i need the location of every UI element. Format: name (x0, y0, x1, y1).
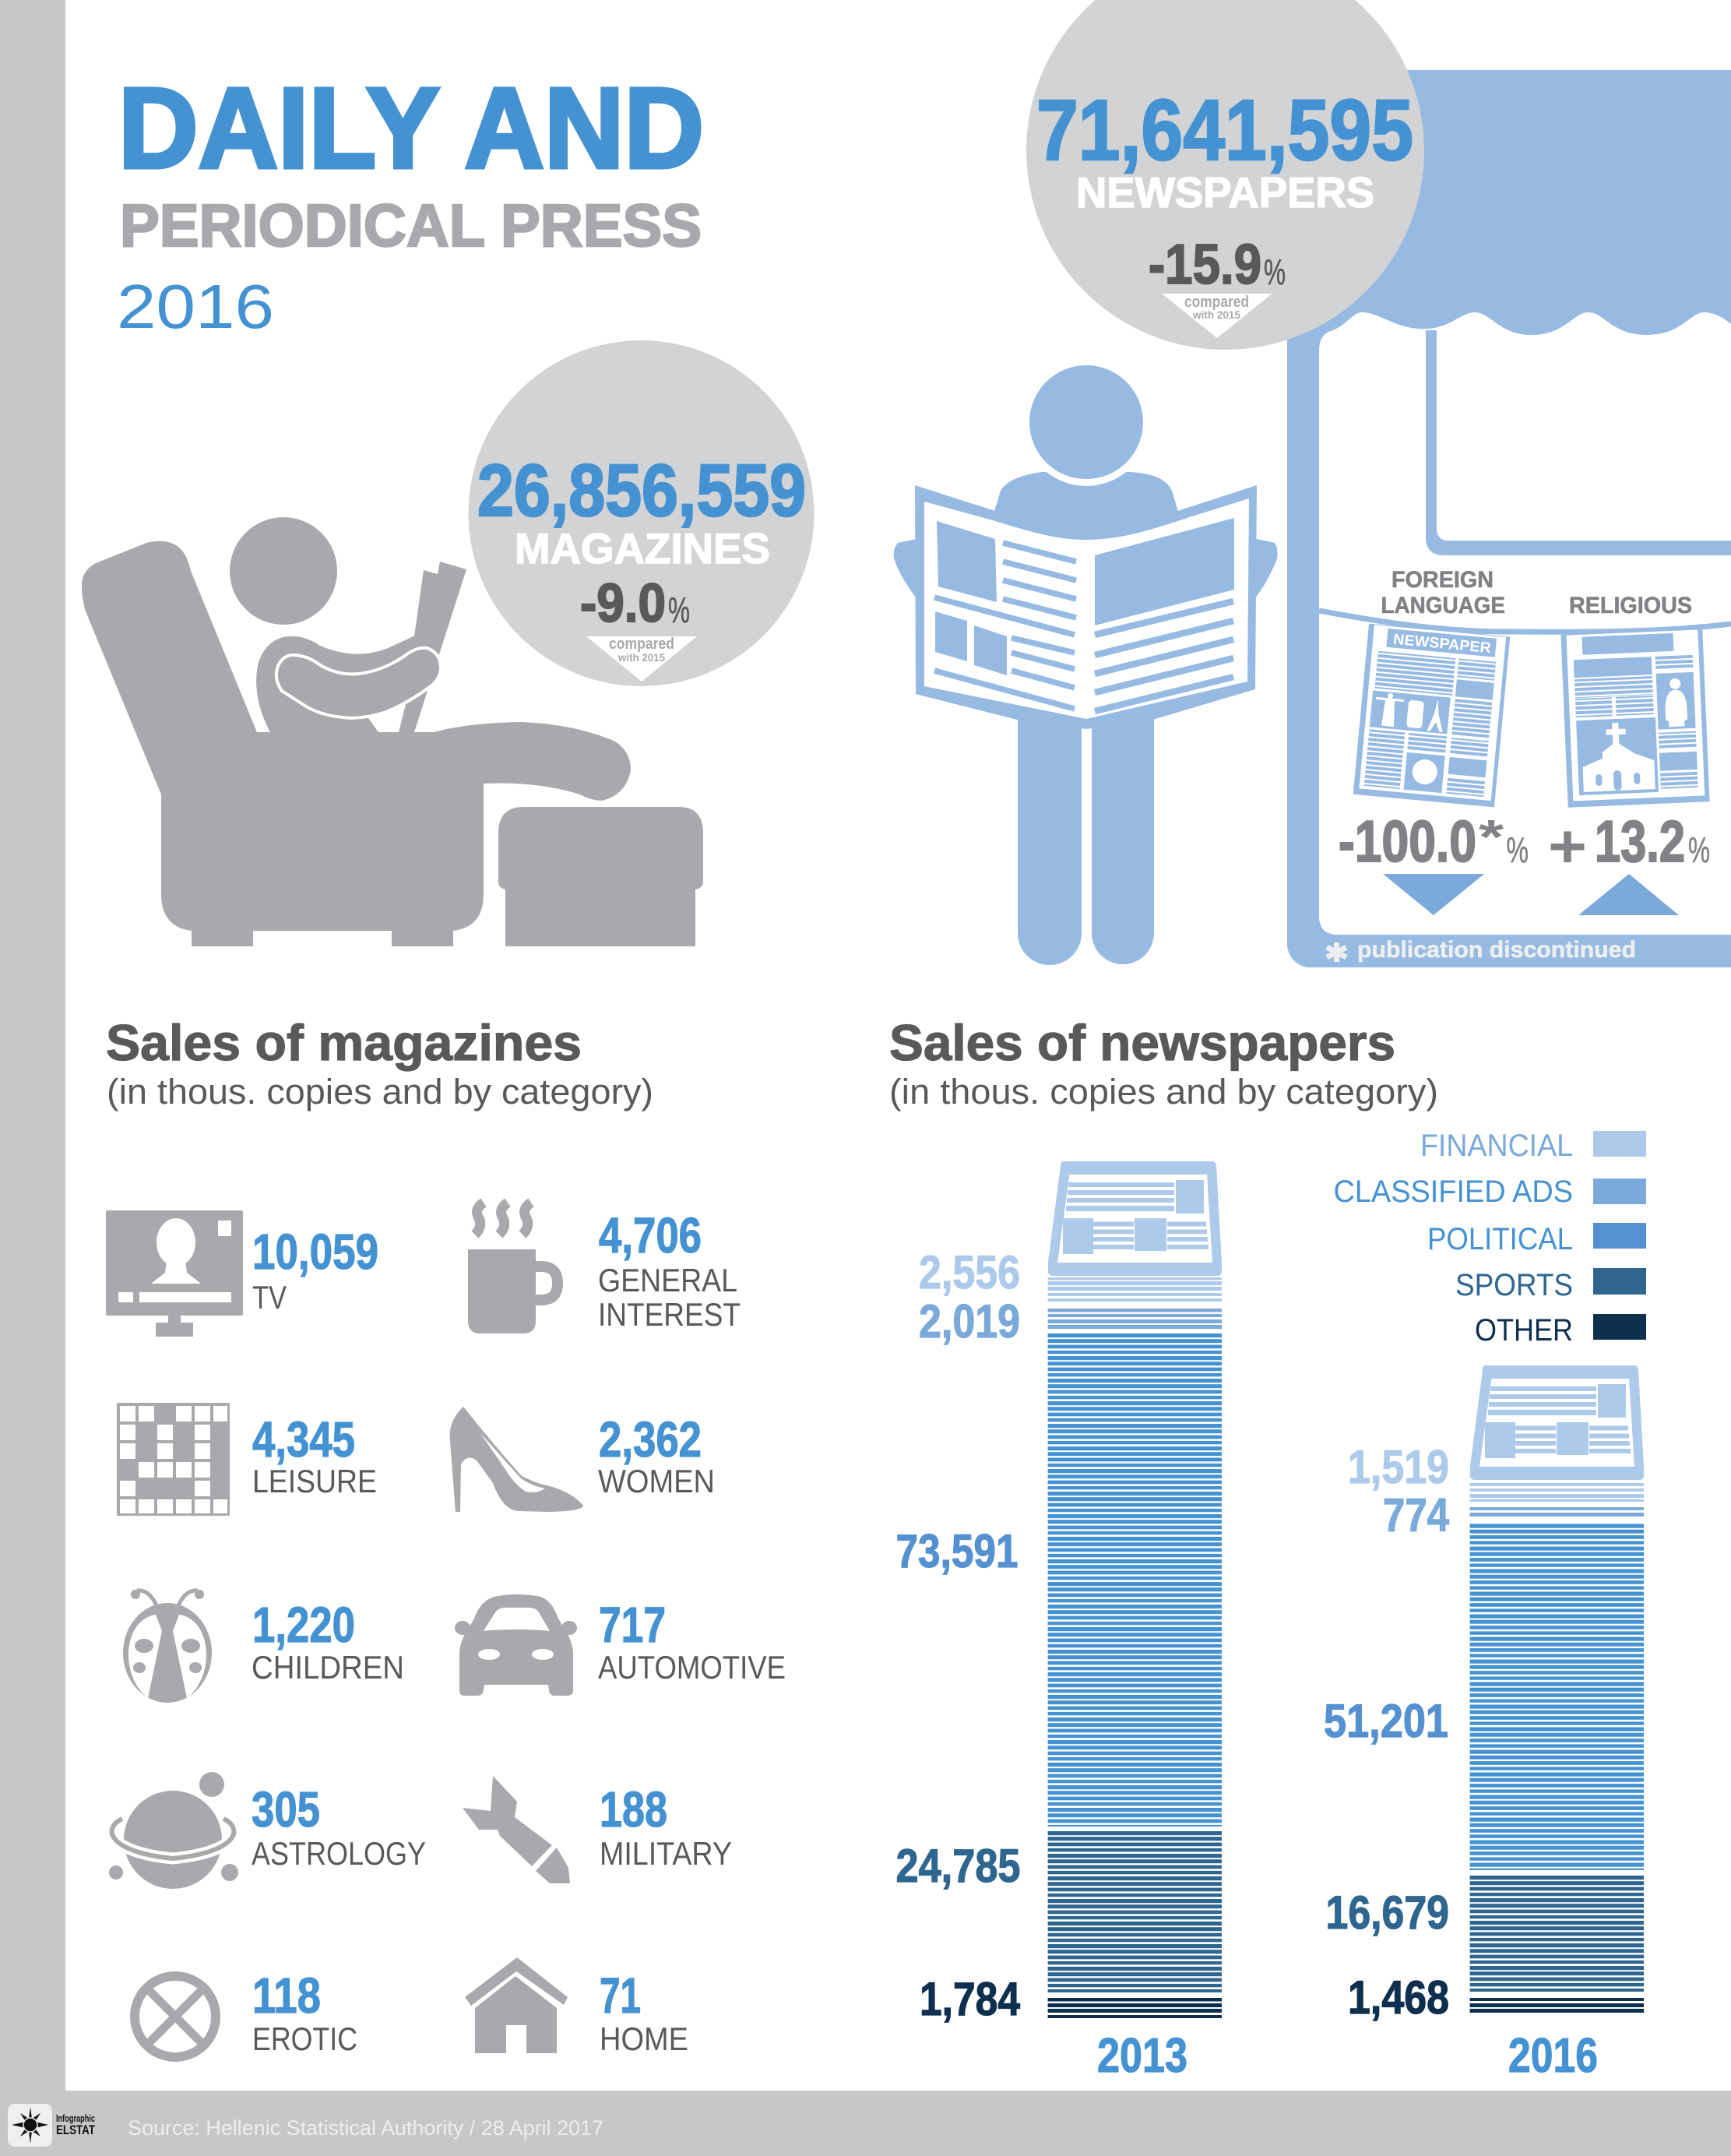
title line: daily and: DAILY AND (118, 65, 704, 192)
label: AUTOMOTIVE (598, 1649, 786, 1686)
value: 4,706 (599, 1207, 702, 1263)
legend (1333, 1129, 1646, 1348)
arrow caption: compared (1184, 294, 1249, 311)
change value: 13.2 (1595, 808, 1685, 874)
legend item: classified ads: CLASSIFIED ADS (1333, 1175, 1573, 1209)
icon: television (106, 1210, 243, 1337)
value: 10,059 (252, 1224, 378, 1280)
heading: sales of magazines (106, 1014, 653, 1111)
newspaper page (924, 498, 1249, 719)
value: financial 2016: 1,519 (1348, 1441, 1449, 1493)
magazine category: astrology (109, 1772, 426, 1889)
financial stripes 2013 (1048, 1277, 1222, 1302)
value: classified 2016: 774 (1383, 1489, 1450, 1541)
newspapers number: 71,641,595 (1036, 83, 1413, 178)
legend item: financial: FINANCIAL (1420, 1129, 1573, 1163)
label: TV (252, 1279, 287, 1316)
magazine category: tv (106, 1210, 378, 1337)
icon: ladybug (123, 1590, 212, 1703)
magazine category: children (123, 1590, 404, 1703)
newspapers label: NEWSPAPERS (1076, 168, 1374, 217)
text lines (1095, 601, 1233, 711)
icon: missile (463, 1776, 570, 1883)
icon: foreign newspaper page: NEWSPAPER (1392, 632, 1492, 657)
head (230, 517, 337, 625)
source line: Source: Hellenic Statistical Authority / 28 April 2017 (128, 2116, 603, 2140)
legs (1018, 701, 1154, 965)
footnote (1327, 937, 1636, 963)
change value: -100.0 (1339, 808, 1476, 874)
value: financial 2013: 2,556 (919, 1246, 1020, 1298)
sports stripes 2013 (1048, 1831, 1222, 1992)
legend item: sports: SPORTS (1455, 1268, 1573, 1302)
heading text: Sales of magazines (106, 1014, 582, 1071)
value: political 2016: 51,201 (1324, 1695, 1448, 1747)
footnote asterisk: * (1479, 811, 1504, 865)
arm (276, 648, 441, 718)
magazine category: military (463, 1776, 732, 1883)
financial stripes 2016 (1470, 1483, 1644, 1502)
foreign language newspaper group (1339, 567, 1529, 915)
callout: newspapers total (1026, 0, 1424, 350)
percent sign: % (1688, 830, 1710, 870)
photo block (1095, 518, 1234, 625)
magazine category: women (450, 1407, 715, 1512)
percent sign: % (1264, 252, 1286, 292)
text lines (934, 543, 1076, 709)
head (1029, 365, 1143, 479)
percent sign: % (1506, 830, 1529, 870)
year label 2016: 2016 (1508, 2029, 1598, 2083)
label: GENERAL (598, 1262, 737, 1298)
down arrow (1162, 294, 1272, 338)
classified stripes 2013 (1048, 1309, 1222, 1329)
change sign: + (1548, 812, 1587, 880)
classified stripes 2016 (1470, 1507, 1644, 1517)
value: 717 (599, 1597, 666, 1653)
hanging string (1319, 611, 1731, 632)
value: sports 2016: 16,679 (1325, 1886, 1449, 1939)
legend item: other (1475, 1313, 1646, 1348)
icon: high heel shoe (450, 1407, 583, 1512)
logo badge (8, 2104, 52, 2147)
logo text top: Infographic (56, 2112, 95, 2124)
down arrow (1383, 874, 1484, 915)
title (117, 65, 704, 341)
torso (256, 635, 436, 732)
magazine category: erotic (135, 1968, 357, 2057)
chart: 2013 stacked bar (895, 1161, 1222, 2083)
icon: person reading magazine in armchair (82, 517, 703, 946)
value: 2,362 (599, 1411, 702, 1467)
other stripes 2016 (1470, 1998, 1644, 2013)
magazine category: home (465, 1957, 688, 2057)
arrow caption year: with 2015 (1192, 308, 1240, 321)
label: ASTROLOGY (252, 1835, 426, 1872)
value: classified 2013: 2,019 (919, 1295, 1020, 1348)
magazines label: MAGAZINES (515, 524, 770, 572)
change value: -9.0 (580, 572, 666, 633)
legend item: sports (1455, 1268, 1646, 1302)
icon: car (455, 1594, 577, 1696)
magazine category: general interest (468, 1203, 741, 1333)
value: 1,220 (252, 1597, 355, 1653)
value: other 2013: 1,784 (920, 1973, 1021, 2025)
subheading: (in thous. copies and by category) (107, 1072, 653, 1111)
icon: house (465, 1957, 568, 2053)
magazine (399, 562, 466, 732)
title line: periodical press: PERIODICAL PRESS (120, 192, 702, 259)
stand interior (1319, 312, 1731, 935)
arrow caption: compared (609, 636, 674, 653)
subheading: (in thous. copies and by category) (889, 1072, 1438, 1111)
political stripes 2013 (1048, 1333, 1222, 1827)
circle (1026, 0, 1424, 350)
icon: newsstand (1287, 70, 1731, 967)
legend item: political: POLITICAL (1427, 1222, 1573, 1256)
sports stripes 2016 (1470, 1876, 1644, 1992)
label: FOREIGN (1391, 567, 1494, 593)
icon: foreign newspaper page (1353, 624, 1510, 807)
icon: newspaper stack top 2013 (1048, 1161, 1222, 1276)
heading: sales of newspapers (889, 1014, 1438, 1111)
newspaper outline (915, 485, 1257, 729)
icon: crossed circle (135, 1976, 216, 2057)
magazines number: 26,856,559 (477, 449, 806, 532)
newspaper left page content (934, 521, 1076, 709)
value: 118 (252, 1968, 321, 2024)
label: HOME (600, 2020, 688, 2057)
footnote text: publication discontinued (1357, 937, 1636, 963)
footer logo (8, 2104, 95, 2147)
label: MILITARY (600, 1835, 732, 1872)
religious newspaper group (1548, 593, 1710, 915)
icon: religious newspaper page (1560, 629, 1710, 808)
percent sign: % (668, 590, 690, 630)
callout: magazines total (469, 340, 814, 686)
title year: 2016 (117, 272, 274, 341)
logo sun mark (12, 2107, 48, 2144)
heading text: Sales of newspapers (889, 1014, 1395, 1071)
legend item: other: OTHER (1475, 1313, 1573, 1348)
value: 188 (600, 1781, 667, 1837)
value: sports 2013: 24,785 (895, 1840, 1020, 1892)
icon: newspaper stack top 2016 (1470, 1365, 1644, 1480)
newspaper right page content (1095, 518, 1234, 711)
year label 2013: 2013 (1097, 2029, 1187, 2083)
political stripes 2016 (1470, 1524, 1644, 1870)
arrow caption year: with 2015 (617, 651, 665, 664)
label: WOMEN (598, 1463, 715, 1499)
label: CHILDREN (252, 1649, 404, 1686)
gap around head (1022, 358, 1150, 486)
logo text bottom: ELSTAT (56, 2123, 95, 2137)
hands (894, 537, 1278, 604)
value: 305 (252, 1781, 320, 1837)
label: EROTIC (252, 2020, 357, 2057)
left margin bar (0, 0, 65, 2156)
value: other 2016: 1,468 (1348, 1971, 1449, 2024)
label second line: INTEREST (598, 1296, 741, 1333)
label: LEISURE (252, 1463, 377, 1499)
photo blocks (935, 521, 1007, 675)
chart: 2016 stacked bar (1324, 1365, 1644, 2083)
value: political 2013: 73,591 (895, 1525, 1019, 1577)
icon: man reading newspaper (894, 358, 1278, 965)
circle (469, 340, 814, 686)
icon: star (1327, 942, 1346, 962)
icon: mug (468, 1203, 558, 1333)
icon: planet (109, 1772, 238, 1889)
shoulders (989, 472, 1184, 549)
footstool (498, 807, 703, 946)
stand frame and awning (1287, 70, 1731, 967)
magazine category: leisure (117, 1403, 377, 1516)
value: 4,345 (252, 1411, 355, 1467)
footer bar (0, 2091, 1731, 2156)
label: RELIGIOUS (1569, 593, 1692, 618)
icon: crossword (117, 1403, 230, 1516)
down arrow (586, 636, 697, 682)
magazine category: automotive (455, 1594, 786, 1696)
other stripes 2013 (1048, 1998, 1222, 2018)
up arrow (1578, 874, 1679, 915)
label second line: LANGUAGE (1381, 593, 1505, 618)
change value: -15.9 (1149, 234, 1261, 296)
value: 71 (600, 1968, 641, 2024)
armchair (82, 541, 631, 946)
window frame (1426, 330, 1731, 555)
